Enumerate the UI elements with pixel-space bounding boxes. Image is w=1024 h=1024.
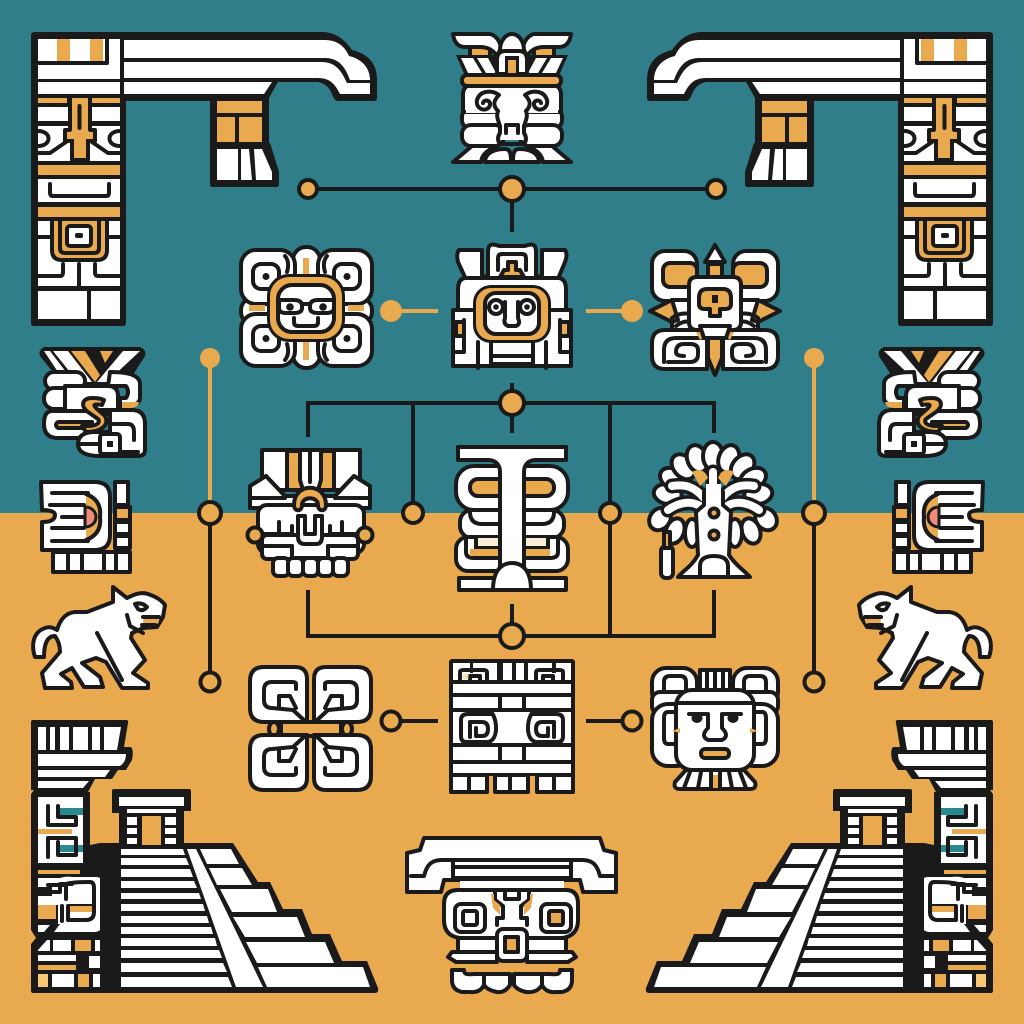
connector: middle branching tree bbox=[308, 383, 714, 636]
orange bands and cartouche bbox=[38, 165, 120, 217]
stair balustrade bbox=[187, 849, 263, 987]
stem and cap bbox=[458, 447, 566, 590]
glyph: right column serpent knot (mirror) bbox=[879, 347, 984, 456]
hanging chain bbox=[661, 532, 673, 578]
icon: jaguar left bbox=[33, 587, 165, 688]
pyramid silhouette bbox=[100, 789, 378, 993]
stepped pyramid and tower, bottom left bbox=[31, 720, 378, 993]
glyph: left column serpent knot bbox=[40, 347, 145, 456]
glyph: top centre skull with headdress bbox=[453, 34, 571, 162]
temple lintel and pillar, top right (mirror) bbox=[647, 32, 993, 326]
central stairs bbox=[121, 849, 232, 987]
glyph: human face with headdress bbox=[652, 668, 778, 789]
glyph: T-shaped rib column bbox=[456, 447, 568, 590]
glyph: central crowned deity bbox=[453, 244, 571, 368]
connector bar bbox=[269, 722, 352, 736]
skull crest bbox=[462, 34, 561, 86]
petal bottom left bbox=[250, 735, 307, 790]
connector: upper orange side links bbox=[380, 300, 643, 322]
sun corner eyes bbox=[253, 264, 360, 351]
hanging block under lintel bbox=[217, 101, 272, 180]
teeth row bbox=[53, 552, 130, 572]
trunk bbox=[678, 484, 750, 577]
centre slit bbox=[307, 690, 314, 767]
icon: jaguar right (mirror) bbox=[859, 587, 991, 688]
upper lobes bbox=[652, 251, 778, 301]
coiled ribs bbox=[456, 466, 568, 571]
branches bbox=[668, 470, 759, 510]
brick base teeth bbox=[451, 775, 573, 792]
petal bottom right bbox=[314, 735, 371, 790]
glyph: mid left mask with orange arc bbox=[248, 450, 372, 576]
face bbox=[248, 488, 372, 559]
connector network bbox=[199, 177, 825, 730]
glyph: world tree bbox=[645, 442, 781, 578]
scroll row bbox=[453, 712, 571, 743]
glyph: sun face bbox=[241, 247, 372, 368]
jaw body bbox=[41, 482, 110, 550]
glyph: bottom centre capital with mask bbox=[407, 838, 616, 992]
headdress block bbox=[262, 450, 360, 490]
side stack bbox=[115, 482, 130, 548]
serpent body bbox=[44, 372, 145, 456]
side points bbox=[650, 300, 780, 332]
mask bands bbox=[448, 938, 576, 962]
teeth bbox=[273, 558, 348, 576]
background: teal upper half bbox=[0, 0, 1024, 513]
petal top right bbox=[314, 667, 371, 722]
crown bbox=[457, 244, 566, 286]
brick bands bbox=[453, 684, 571, 773]
skull face bbox=[463, 85, 561, 144]
deity face bbox=[473, 285, 551, 343]
canopy lobes bbox=[645, 442, 781, 547]
sun central face bbox=[267, 274, 345, 342]
head lobes bbox=[652, 668, 778, 766]
chevrons bbox=[40, 347, 145, 386]
pillar base with concentric square bbox=[38, 221, 120, 319]
pillar mask with orange nose bbox=[38, 98, 120, 161]
snout box bbox=[689, 277, 741, 338]
tower top stripes bbox=[38, 727, 126, 788]
shoulders bbox=[453, 278, 571, 368]
connector: right vertical link bbox=[803, 348, 825, 692]
connector: left vertical link bbox=[199, 348, 221, 692]
capital lintel bbox=[407, 838, 616, 892]
glyph: carved brick wall bbox=[449, 659, 575, 792]
beard fringe bbox=[675, 770, 755, 789]
tower lower blocks bbox=[38, 940, 100, 987]
tower maze panel bbox=[38, 797, 83, 863]
brick top course bbox=[453, 663, 571, 680]
background: orange lower half bbox=[0, 513, 1024, 1024]
arrow spear bbox=[705, 245, 725, 375]
face bbox=[672, 690, 758, 770]
lower spiral lobes bbox=[652, 330, 778, 375]
stepped pyramid and tower, bottom right (mirror) bbox=[646, 720, 993, 993]
connector: top horizontal link bbox=[299, 177, 725, 232]
pyramid terraces bbox=[200, 849, 370, 987]
pillar cap with orange bars bbox=[38, 39, 120, 94]
glyph: winged arrow mask bbox=[650, 245, 780, 375]
wings bbox=[250, 476, 370, 508]
temple on top bbox=[119, 797, 184, 845]
connector: lower bracket bbox=[308, 590, 714, 648]
glyph: left column open jaw block bbox=[41, 482, 130, 572]
temple lintel and pillar, top left bbox=[31, 32, 377, 326]
sun petals bbox=[241, 247, 372, 368]
mask fringe bbox=[452, 970, 572, 992]
lintel stripes bbox=[124, 40, 370, 94]
connector: bottom row links bbox=[382, 712, 642, 730]
tower silhouette bbox=[31, 720, 133, 993]
glyph: right column open jaw block (mirror) bbox=[894, 482, 983, 572]
petal top left bbox=[250, 667, 307, 722]
mask face bbox=[444, 890, 578, 961]
glyph: quatrefoil knot bbox=[250, 667, 371, 790]
tower scroll bbox=[38, 870, 103, 932]
